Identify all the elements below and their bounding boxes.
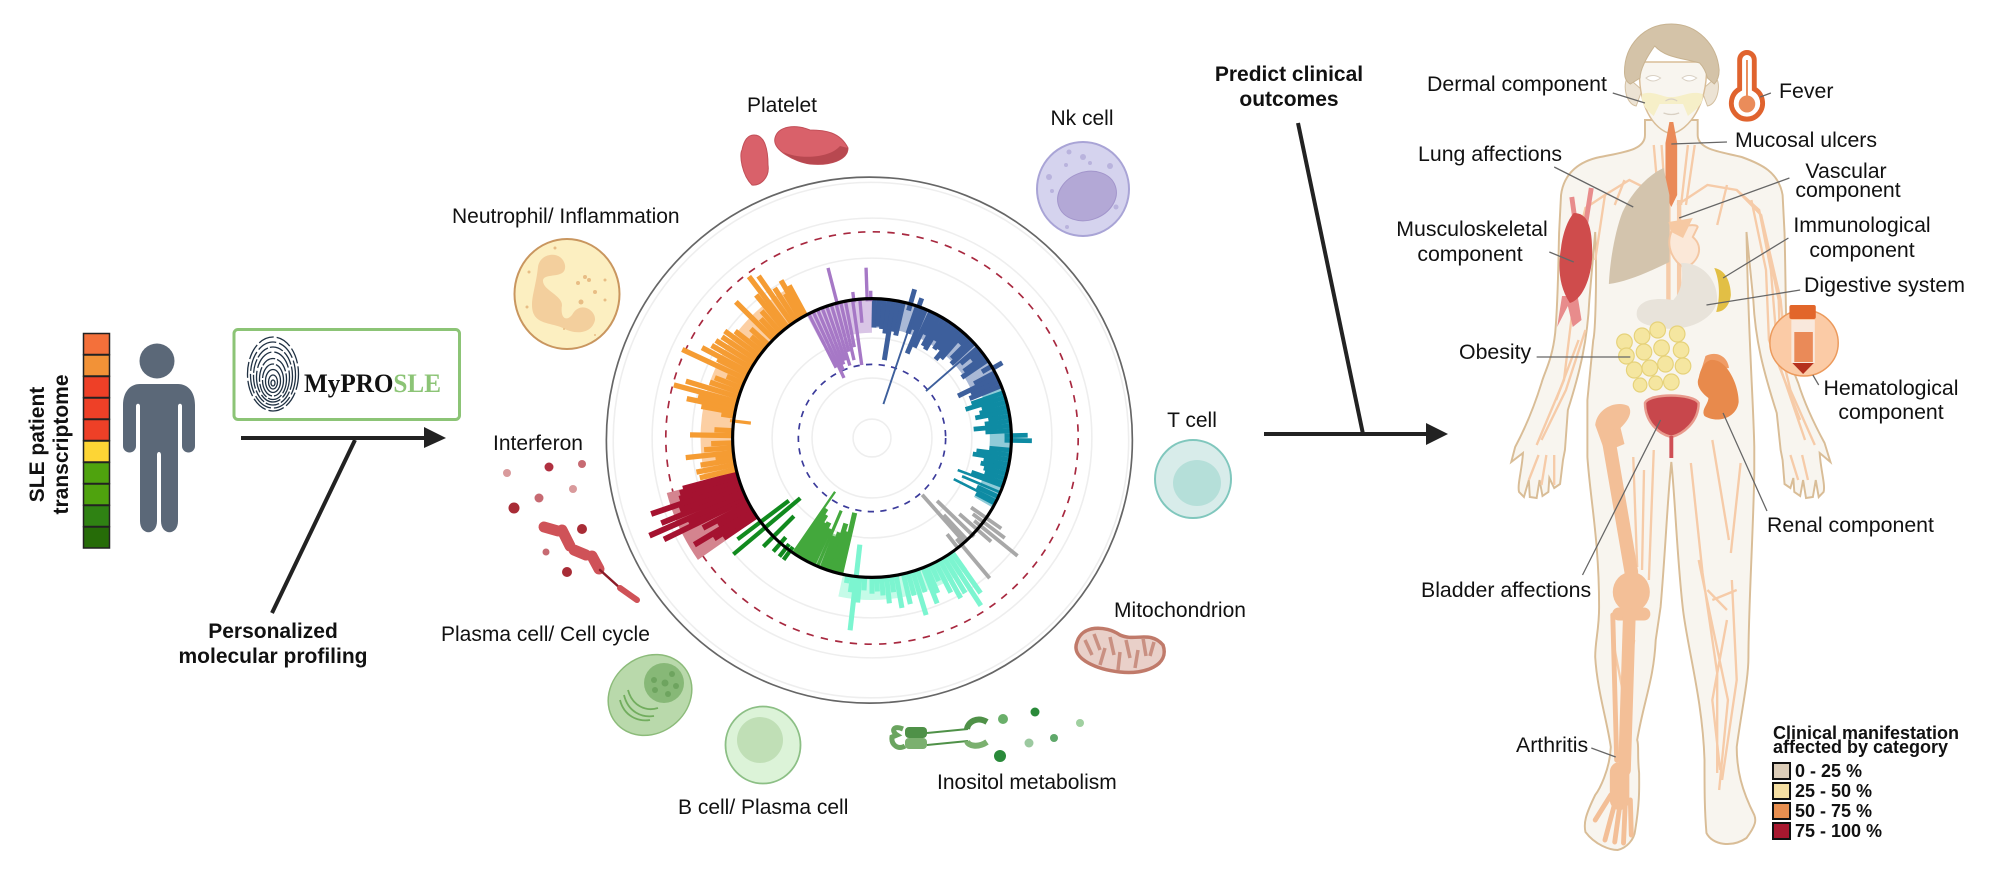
bars: teal module: [954, 393, 1032, 503]
cell label: Interferon: Interferon: [493, 432, 583, 455]
threshold dashed ring: lower: [798, 364, 946, 512]
clinical labels: Hematological: [1824, 376, 1958, 400]
clinical labels: Dermal component: [1427, 72, 1607, 96]
heading: SLE patient transcriptome: SLE patient: [26, 387, 49, 502]
arrow: chart to clinical outcomes: [1264, 123, 1448, 445]
bars: NK purple module: [809, 268, 871, 378]
text: predict clinical outcomes: [1215, 63, 1363, 111]
spleen: [1714, 268, 1731, 312]
clinical labels: Obesity: [1459, 340, 1532, 364]
cell label: Platelet: Platelet: [747, 94, 817, 117]
icon: thermometer: [1731, 52, 1763, 119]
legend: clinical manifestation categories: [1773, 723, 1959, 841]
clinical labels: Mucosal ulcers: [1735, 128, 1877, 152]
stomach: [1637, 263, 1717, 329]
central black ring: [733, 299, 1011, 577]
icon: NK cell: [1037, 142, 1129, 236]
clinical labels: Renal component: [1767, 513, 1934, 537]
bars: plasma-cell dark green module: [733, 498, 800, 560]
legend: clinical manifestation categories: affected by category: [1773, 737, 1948, 757]
bars: inositol turquoise module: [846, 545, 981, 630]
bars: interferon crimson module: [649, 474, 757, 545]
cell label: B cell: B cell/ Plasma cell: [678, 796, 848, 819]
body outline: [1511, 120, 1830, 850]
icon: mitochondrion: [1076, 628, 1164, 673]
clinical labels: component: [1795, 178, 1901, 202]
icon: inositol metabolism enzyme and dots: [892, 708, 1084, 762]
legend: clinical manifestation categories: 50 - 75 %: [1795, 801, 1872, 821]
clinical labels: Fever: [1779, 79, 1833, 103]
bladder: [1645, 396, 1699, 458]
bars: neutrophil orange module: [674, 276, 806, 478]
heart: [1669, 225, 1699, 268]
icon: neutrophil: [514, 239, 620, 349]
heading: SLE patient transcriptome: [26, 374, 73, 515]
cell label: Plasma cell: Plasma cell/ Cell cycle: [441, 623, 650, 646]
circular bar chart: [606, 177, 1132, 703]
bars: T-cell/blue module: [874, 289, 1002, 404]
esophagus: [1665, 122, 1677, 207]
cell label: Mitochondrion: Mitochondrion: [1114, 599, 1246, 622]
kidney: [1698, 354, 1739, 420]
text: personalized molecular profiling: molecular profiling: [178, 645, 368, 668]
biceps muscle: [1557, 188, 1592, 327]
icon: platelets: [741, 127, 848, 185]
icon: fingerprint: [248, 337, 298, 411]
text: personalized molecular profiling: Personalized: [208, 620, 338, 643]
clinical labels: Bladder affections: [1421, 578, 1591, 602]
legend: clinical manifestation categories: 0 - 25 %: [1795, 761, 1862, 781]
cell label: Nk cell: Nk cell: [1050, 107, 1114, 130]
lung: [1609, 168, 1669, 284]
text: predict clinical outcomes: Predict clinical: [1215, 63, 1363, 86]
legend: clinical manifestation categories: Clinical manifestation: [1773, 723, 1959, 743]
icon: patient figure: [123, 344, 195, 532]
text: predict clinical outcomes: outcomes: [1239, 88, 1339, 111]
femur and leg bones: [1595, 404, 1650, 843]
clinical labels: Immunological: [1793, 213, 1931, 237]
heading: SLE patient transcriptome: transcriptome: [50, 374, 73, 515]
butterfly rash: [1642, 93, 1703, 116]
vessels and nerves: [1529, 145, 1815, 790]
bars: gray module: [922, 495, 1018, 578]
heatmap bar: patient transcriptome: [84, 334, 110, 548]
clinical labels: Vascular: [1805, 159, 1887, 183]
outer chart ring: [606, 177, 1132, 703]
icon: plasma cell: [592, 638, 708, 752]
clinical labels: component: [1417, 242, 1523, 266]
blood sample tube: [1770, 305, 1838, 376]
cell label: Neutrophil: Neutrophil/ Inflammation: [452, 205, 680, 228]
clinical labels: Musculoskeletal: [1396, 217, 1548, 241]
clinical labels: [1396, 72, 1965, 757]
clinical labels: Digestive system: [1804, 273, 1965, 297]
icon: interferon cytokines: [503, 460, 637, 600]
threshold dashed ring: upper: [666, 232, 1078, 644]
clinical labels: Lung affections: [1418, 142, 1562, 166]
category background wedges: [627, 193, 1117, 683]
legend: clinical manifestation categories: 25 - 50 %: [1795, 781, 1872, 801]
chart grid rings: [613, 182, 1129, 698]
bars: B-cell green module: [793, 492, 855, 573]
clinical labels: Arthritis: [1516, 733, 1588, 757]
arrow: profiling to circular chart: [241, 427, 446, 613]
logo wordmark: MyPROSLE: [304, 369, 441, 398]
leader lines: [1537, 93, 1819, 757]
cell label: Inositol metabolism: Inositol metabolism: [937, 771, 1117, 794]
abdominal fat: [1617, 322, 1691, 392]
clinical labels: component: [1838, 400, 1944, 424]
logo box: MyPROSLE: [234, 330, 460, 420]
human body illustration: [1511, 24, 1838, 850]
icon: B cell: [726, 706, 800, 784]
hair and head: [1624, 24, 1719, 134]
clinical labels: component: [1809, 238, 1915, 262]
text: personalized molecular profiling: [178, 620, 368, 668]
cell label: T cell: T cell: [1167, 409, 1217, 432]
legend: clinical manifestation categories: 75 - 100 %: [1795, 821, 1882, 841]
icon: T cell: [1155, 440, 1231, 518]
